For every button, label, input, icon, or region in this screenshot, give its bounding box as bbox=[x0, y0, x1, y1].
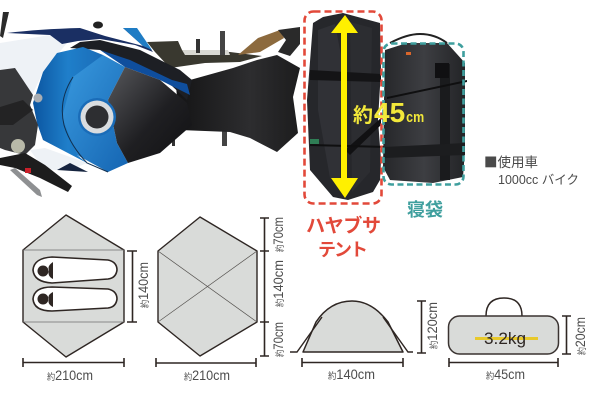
dimension: roof plan heights: 約140cm bbox=[270, 260, 286, 307]
dimension: roof plan heights: 約70cm bbox=[270, 322, 286, 357]
dimension: bag width 45 bbox=[449, 358, 558, 382]
white fairing bbox=[0, 35, 67, 100]
dimension: roof plan heights bbox=[260, 217, 286, 357]
weight label: 3.2kg bbox=[484, 329, 526, 348]
dimension: side height 120: 約120cm bbox=[424, 302, 440, 349]
dimension: roof plan width 210: 約210cm bbox=[184, 367, 230, 383]
vehicle note bbox=[484, 151, 579, 187]
label: Hayabusa tent bbox=[306, 214, 381, 260]
tank carbon panel bbox=[108, 67, 192, 163]
dark strip above tank bbox=[70, 40, 192, 100]
dimension: plan height 140: 約140cm bbox=[135, 262, 151, 308]
diagram: tent roof plan bbox=[158, 217, 257, 356]
handlebar and controls bbox=[0, 68, 38, 155]
dimension: side width 140 bbox=[302, 358, 403, 382]
sleeping bag upper bbox=[33, 257, 117, 283]
vehicle note: ■使用車 bbox=[484, 151, 538, 171]
label: Hayabusa tent: ハヤブサ bbox=[306, 214, 381, 237]
rear frame and exhaust bbox=[147, 41, 262, 68]
label: sleeping bag: 寝袋 bbox=[407, 200, 443, 220]
dimension: bag width 45: 約45cm bbox=[486, 366, 525, 382]
dimension: bag height 20 bbox=[562, 316, 588, 355]
tent stuff bag bbox=[307, 13, 385, 200]
diagram: carry bag bbox=[448, 298, 558, 354]
dimension: roof plan heights: 約70cm bbox=[270, 217, 286, 252]
diagram: tent side view bbox=[290, 301, 413, 352]
blue tank panel bbox=[62, 55, 128, 172]
sleeping bag lower bbox=[33, 287, 117, 311]
motorcycle photo bbox=[0, 12, 300, 197]
dimension: roof plan width 210 bbox=[156, 358, 256, 383]
dimension: bag height 20: 約20cm bbox=[572, 317, 588, 355]
diagram: tent floor plan bbox=[23, 215, 124, 357]
dimension: plan height 140 bbox=[127, 251, 151, 322]
sleeping bag bbox=[383, 34, 467, 183]
navy fairing band bbox=[7, 28, 153, 52]
dimension: side width 140: 約140cm bbox=[328, 366, 375, 382]
seat bbox=[175, 55, 300, 152]
dimension: plan width 210 left: 約210cm bbox=[47, 367, 93, 383]
blue tank side bbox=[33, 47, 103, 163]
vehicle note: 1000cc バイク bbox=[498, 173, 579, 187]
dashed outline: tent bbox=[304, 12, 382, 204]
dimension: plan width 210 left bbox=[23, 358, 124, 383]
measurement: about 45 cm: 約45cm bbox=[353, 97, 424, 128]
yellow height arrow bbox=[331, 15, 358, 198]
label: Hayabusa tent: テント bbox=[318, 240, 368, 260]
dimension: side height 120 bbox=[417, 301, 440, 353]
dashed outline: sleeping bag bbox=[384, 44, 464, 184]
fuel cap bbox=[78, 98, 116, 136]
